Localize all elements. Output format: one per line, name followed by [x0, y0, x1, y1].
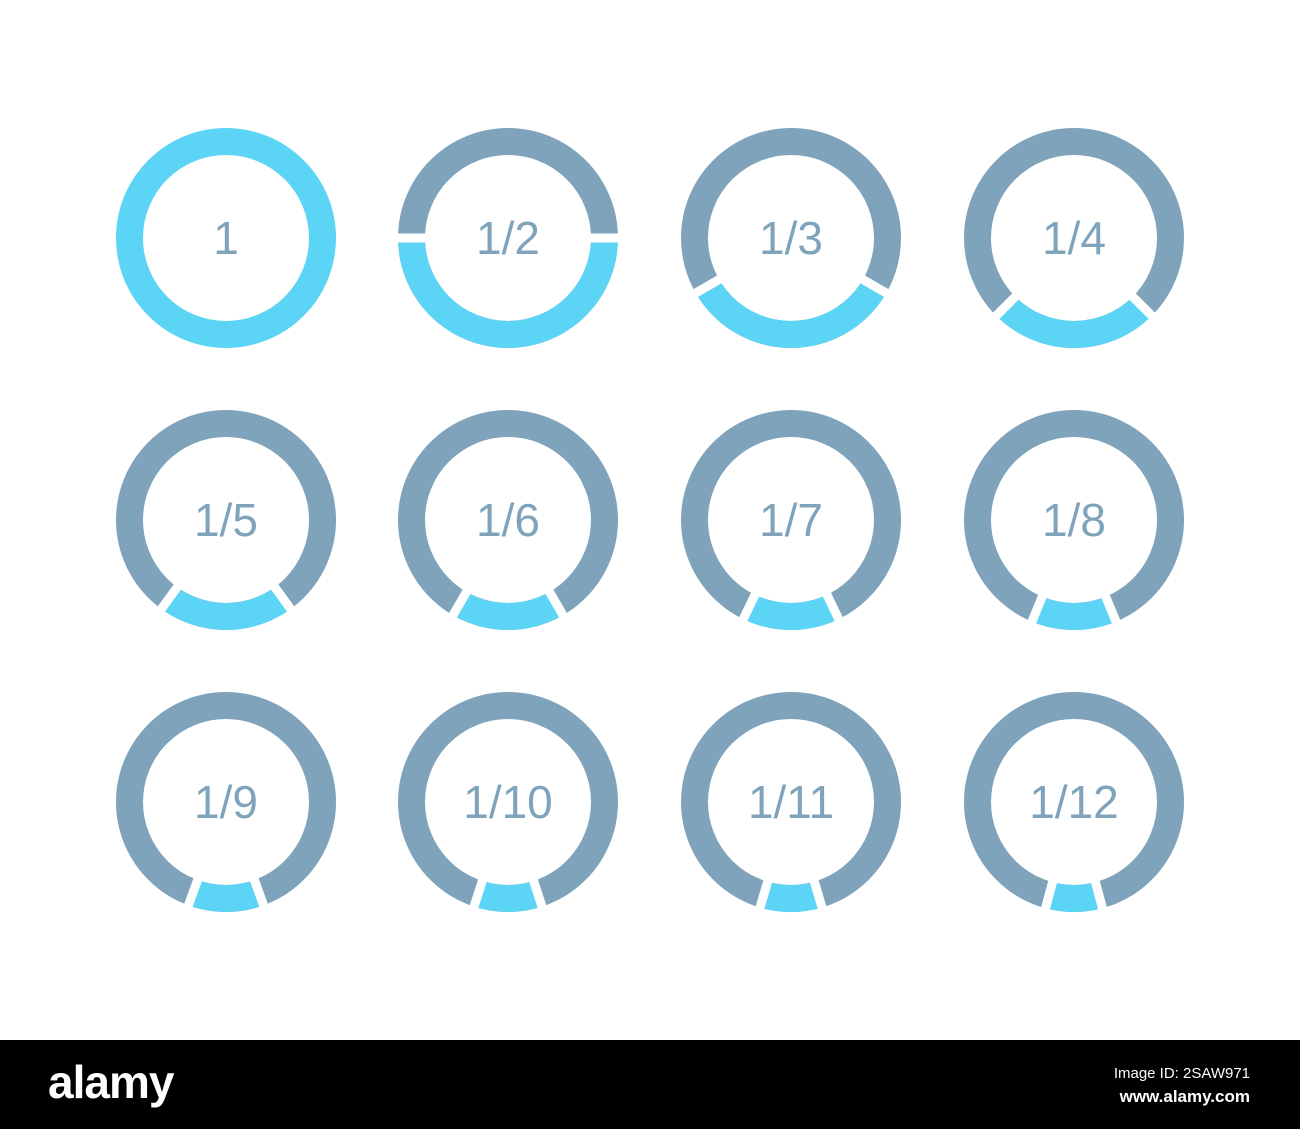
- gauge: 1/2: 1/2: [476, 212, 540, 264]
- gauge: 1: [130, 142, 322, 334]
- gauge: 1/12: [956, 684, 1192, 920]
- gauge: 1/10: 1/10: [463, 776, 553, 828]
- gauge: 1/10: [386, 680, 630, 924]
- gauge: 1/9: [102, 678, 350, 926]
- gauge: 1/9: 1/9: [194, 776, 258, 828]
- gauge: 1/6: [376, 388, 640, 652]
- footer image id: Image ID: 2SAW971: [1114, 1065, 1250, 1082]
- gauge: 1/11: [671, 682, 911, 922]
- gauge: 1/11: 1/11: [748, 776, 834, 828]
- gauge: 1: 1: [213, 212, 239, 264]
- gauge: 1/7: 1/7: [759, 494, 823, 546]
- gauge: 1/3: 1/3: [759, 212, 823, 264]
- gauge: 1/4: 1/4: [1042, 212, 1106, 264]
- footer bar: [0, 1040, 1300, 1129]
- gauge: 1/8: [948, 394, 1200, 646]
- gauge: 1/5: 1/5: [194, 494, 258, 546]
- gauge: 1/2: [396, 142, 620, 334]
- gauge: 1/4: [938, 102, 1210, 374]
- gauge: 1/7: [662, 391, 920, 649]
- gauge: 1/8: 1/8: [1042, 494, 1106, 546]
- gauge: 1/5: [91, 385, 361, 655]
- footer url: www.alamy.com: [1119, 1087, 1250, 1106]
- footer logo: alamy: [48, 1056, 175, 1108]
- gauge: 1/3: [659, 106, 923, 370]
- gauge: 1/6: 1/6: [476, 494, 540, 546]
- gauge: 1/12: 1/12: [1029, 776, 1119, 828]
